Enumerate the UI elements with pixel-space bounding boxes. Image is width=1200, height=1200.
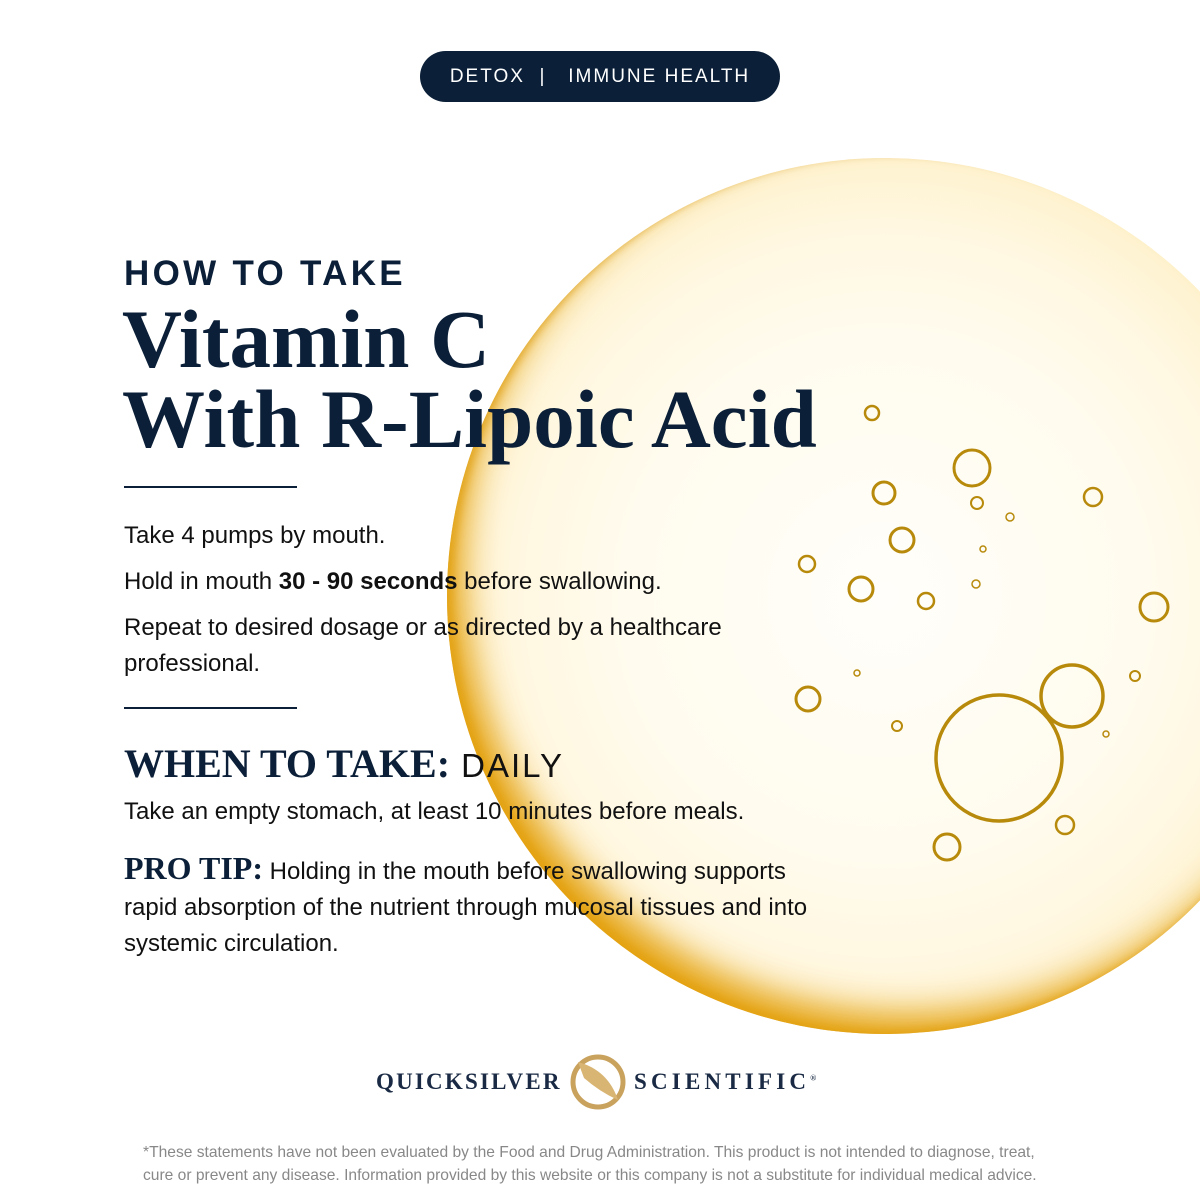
title: With R-Lipoic Acid xyxy=(122,373,817,465)
disclaimer: cure or prevent any disease. Information provided by this website or this company is not a substitute for individual medical advice. xyxy=(143,1167,1037,1184)
instructions text: Take 4 pumps by mouth. xyxy=(124,522,385,549)
logo: SCIENTIFIC® xyxy=(634,1069,820,1094)
tag pill xyxy=(420,51,780,102)
instructions text: Repeat to desired dosage or as directed by a healthcare professional. xyxy=(124,614,722,677)
title xyxy=(122,293,817,465)
disclaimer xyxy=(143,1144,1037,1184)
when to take heading: WHEN TO TAKE: DAILY xyxy=(124,741,564,786)
when text: Take an empty stomach, at least 10 minutes before meals. xyxy=(124,798,744,825)
title: Vitamin C xyxy=(122,293,490,385)
instructions text: Hold in mouth 30 - 90 seconds before swallowing. xyxy=(124,568,662,595)
tag pill: DETOX | IMMUNE HEALTH xyxy=(450,66,750,87)
logo xyxy=(376,1054,820,1110)
disclaimer: *These statements have not been evaluated by the Food and Drug Administration. This product is not intended to diagnose, treat, xyxy=(143,1144,1035,1161)
divider top xyxy=(124,486,297,488)
divider xyxy=(124,707,297,709)
instructions text xyxy=(124,522,722,677)
pro tip: PRO TIP: Holding in the mouth before swallowing supports rapid absorption of the nutrient through mucosal tissues and into systemic circulation. xyxy=(124,850,807,957)
icon: logo emblem xyxy=(570,1054,626,1110)
heading: how to take: HOW TO TAKE xyxy=(124,254,406,293)
background circle xyxy=(447,158,1200,1034)
logo: QUICKSILVER xyxy=(376,1069,562,1094)
